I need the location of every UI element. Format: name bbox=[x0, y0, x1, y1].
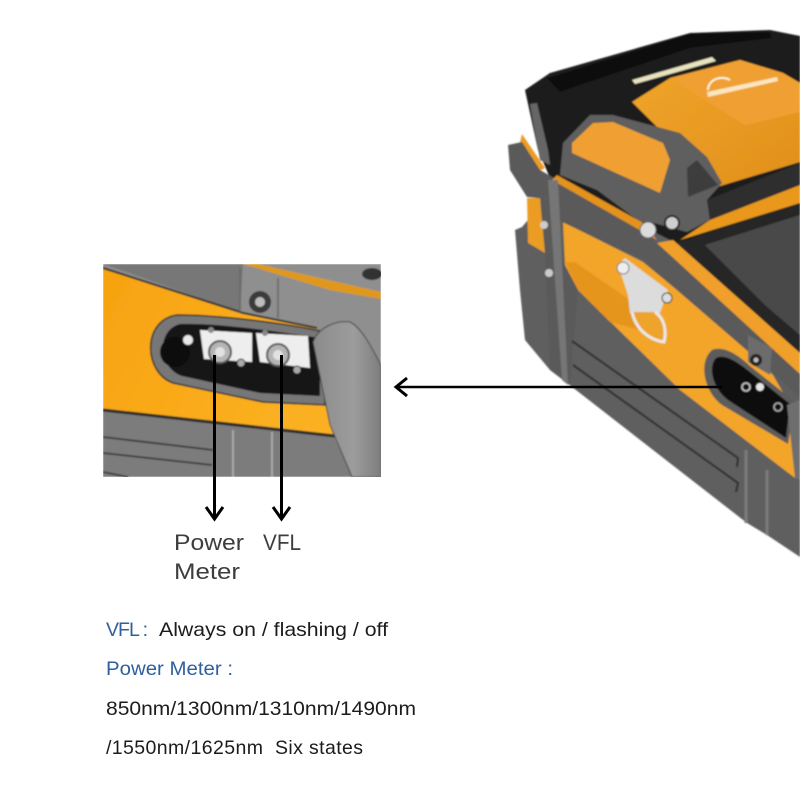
hinge cover bbox=[560, 115, 722, 232]
label: Power Meter: Meter bbox=[174, 559, 240, 584]
arrow: device to inset bbox=[396, 378, 722, 396]
small screw near port bbox=[748, 335, 772, 375]
orange panel bbox=[563, 222, 795, 478]
VFL heading: VFL : bbox=[106, 619, 148, 641]
lower housing bbox=[103, 410, 352, 477]
wavelengths line 1: 850nm/1300nm/1310nm/1490nm bbox=[106, 698, 416, 720]
device photo: fusion splicer bbox=[508, 30, 800, 557]
screws bbox=[640, 222, 656, 238]
black top body bbox=[525, 30, 800, 245]
arrow: power meter bbox=[206, 355, 223, 519]
latch bbox=[617, 258, 672, 342]
power meter port plate bbox=[200, 330, 252, 363]
Power Meter heading: Power Meter : bbox=[106, 658, 233, 680]
orange lid with logo bbox=[632, 60, 800, 187]
wavelengths line 2: /1550nm/1625nm Six states bbox=[106, 737, 363, 759]
VFL port plate bbox=[256, 333, 310, 368]
screw bbox=[249, 291, 271, 313]
label: Power Meter: Power bbox=[174, 530, 244, 555]
label: VFL: VFL bbox=[263, 530, 301, 555]
dark band and orange strip bbox=[707, 163, 800, 220]
port opening bbox=[704, 349, 800, 480]
inset photo: port close-up bbox=[103, 264, 382, 477]
grey cover piece bbox=[313, 322, 381, 477]
vertical strip bbox=[548, 180, 568, 385]
oval port frame bbox=[151, 315, 325, 405]
infographic canvas bbox=[103, 28, 800, 754]
label: Power Meter bbox=[174, 530, 244, 584]
arrow: VFL bbox=[273, 355, 290, 519]
description text bbox=[106, 619, 416, 759]
inset orange housing bbox=[103, 268, 333, 435]
screen bbox=[677, 203, 800, 360]
top orange strip bbox=[243, 264, 381, 299]
left orange and frame bbox=[527, 198, 545, 253]
body grooves bbox=[572, 341, 738, 492]
lower housing bbox=[515, 200, 800, 557]
VFL states: Always on / flashing / off bbox=[159, 619, 389, 641]
